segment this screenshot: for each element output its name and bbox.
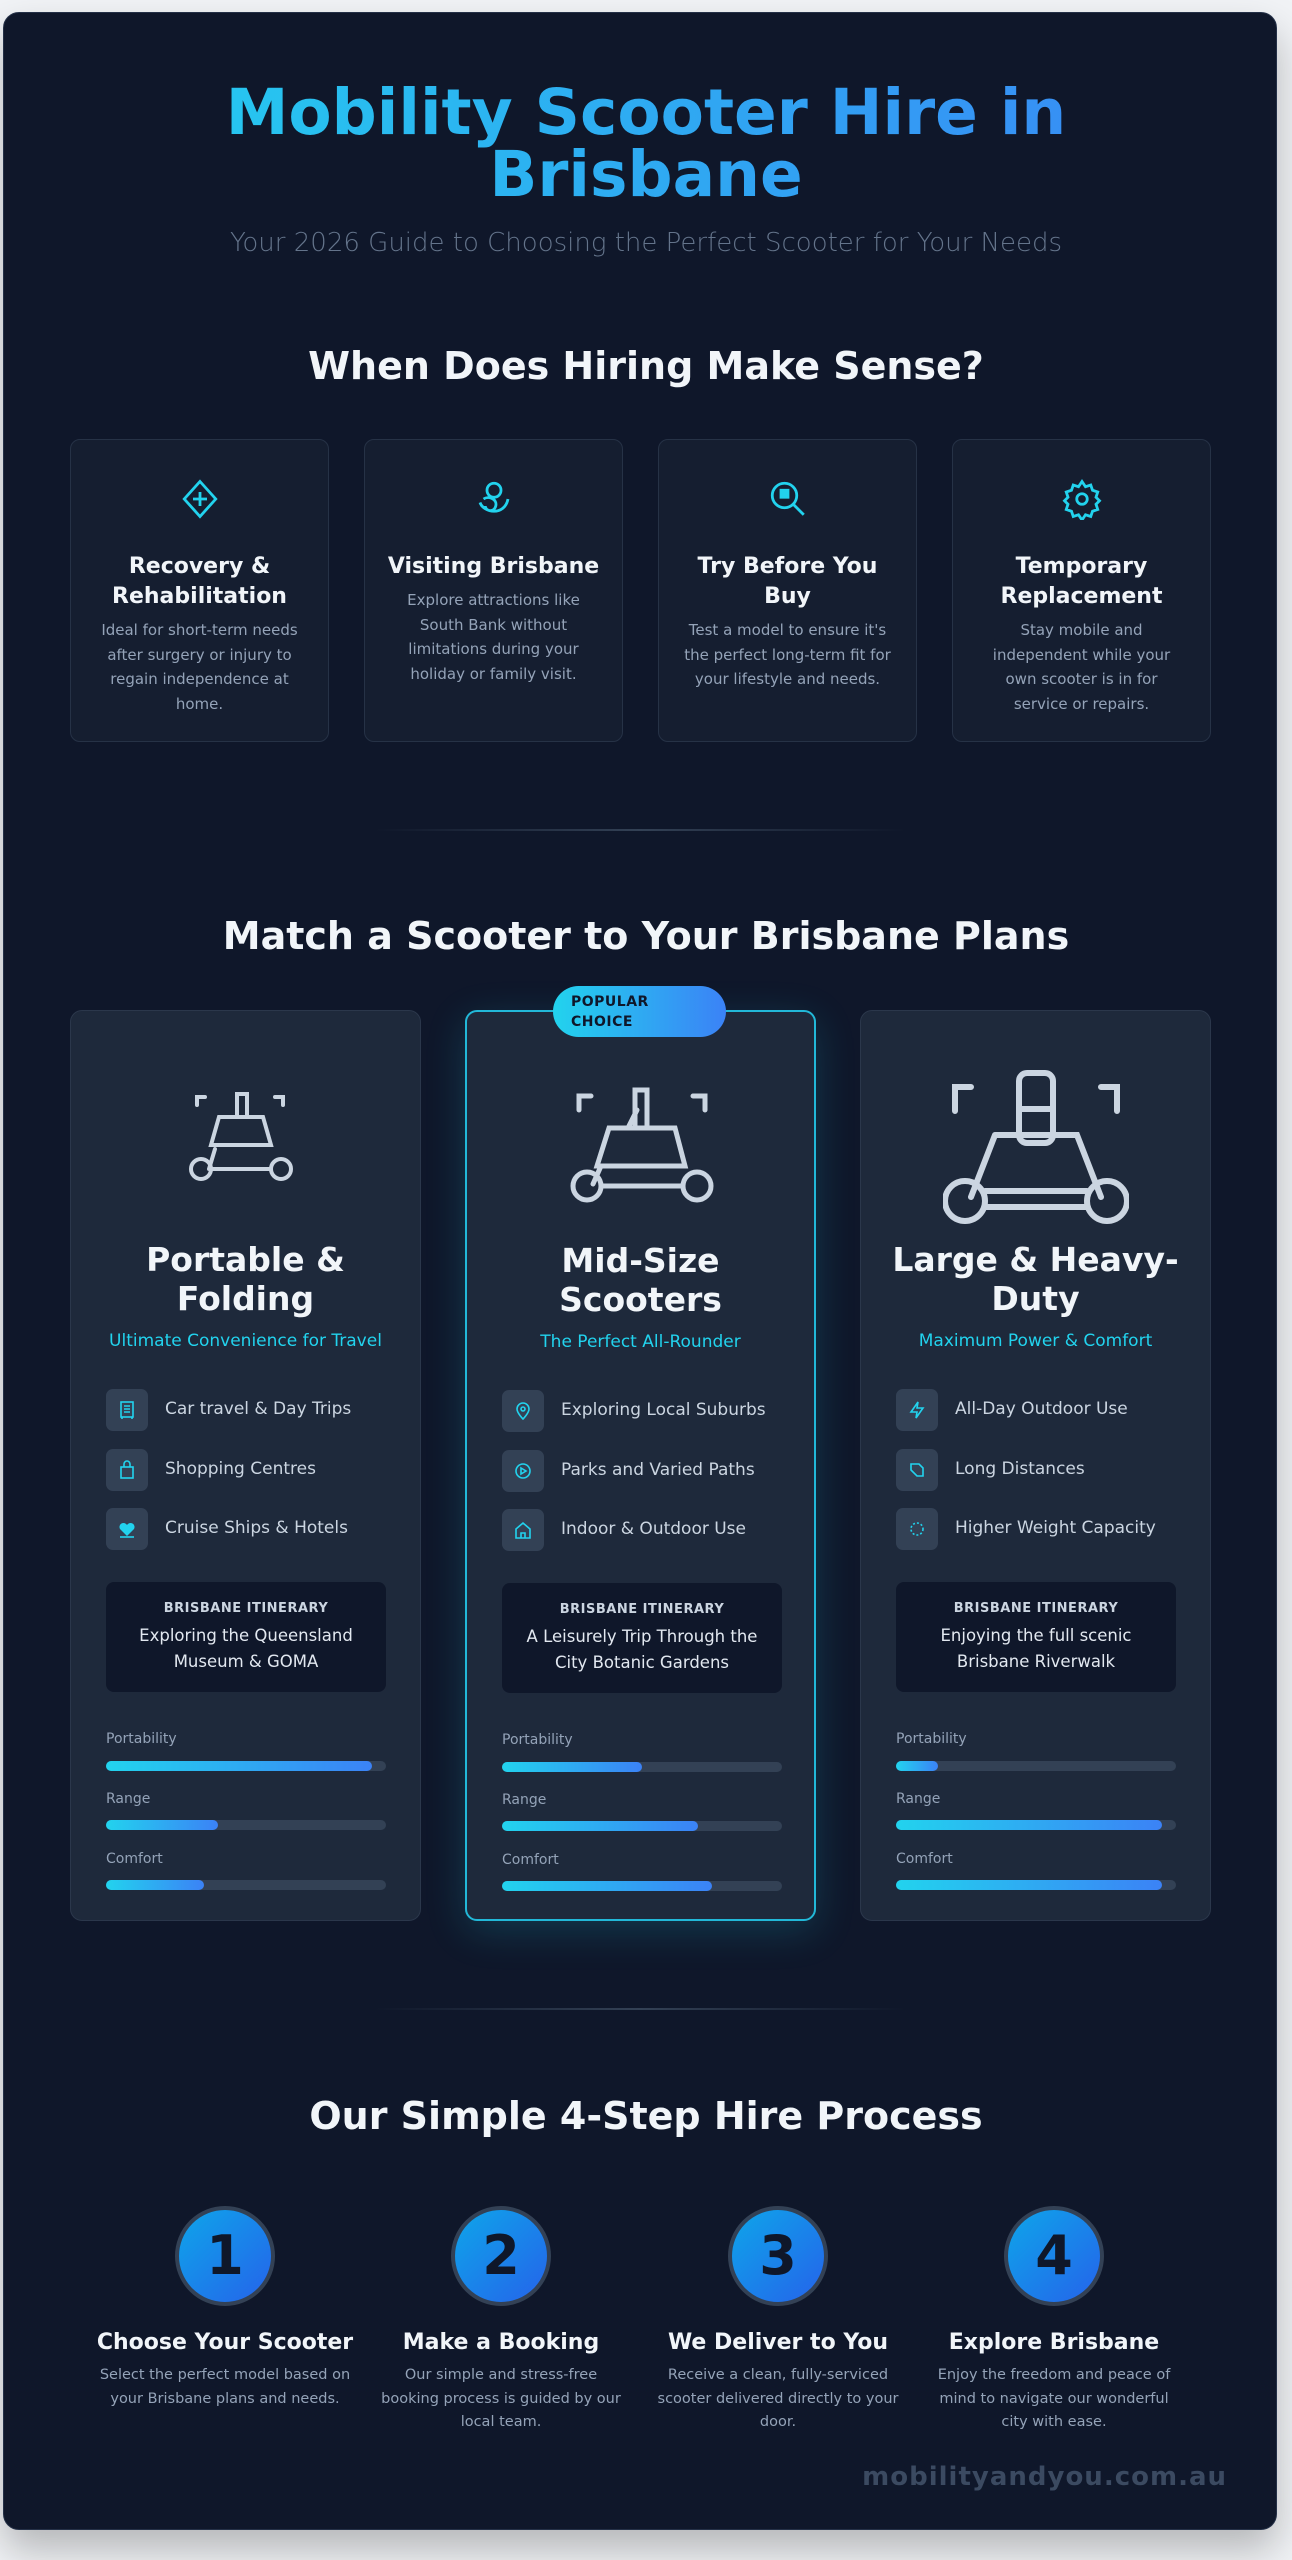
feature: cruise (106, 1508, 348, 1550)
icon: magnifier (770, 482, 805, 516)
heading: when does hiring make sense: When Does Hiring Make Sense? (308, 344, 984, 388)
itinerary box: Museum & GOMA (174, 1652, 318, 1671)
card title: Portable & (146, 1240, 345, 1279)
panel: large heavy-duty (860, 1010, 1211, 1921)
feature: weight (896, 1508, 1156, 1550)
itinerary box (896, 1582, 1176, 1692)
card title: Recovery & (129, 554, 270, 579)
itinerary box: Enjoying the full scenic (940, 1626, 1132, 1645)
icon: map swirl (478, 482, 510, 513)
itinerary box: Brisbane Riverwalk (957, 1652, 1115, 1671)
feature list (502, 1390, 766, 1551)
step 3: Receive a clean, fully-serviced scooter delivered directly to your door. (658, 2367, 898, 2430)
feature: cruise: Cruise Ships & Hotels (165, 1518, 348, 1538)
feature: long distances (896, 1449, 1085, 1491)
heading: match a scooter: Match a Scooter to Your Brisbane Plans (223, 914, 1069, 958)
feature: all-day (896, 1389, 1128, 1431)
title (0, 82, 1292, 206)
panel: recovery (70, 439, 329, 742)
icon: large scooter (943, 1070, 1129, 1224)
step 3: 3 (759, 2224, 797, 2287)
badge: popular choice: CHOICE (571, 1014, 633, 1030)
feature: parks (502, 1450, 755, 1492)
step 4 (938, 2206, 1171, 2430)
panel: mid-size (popular) (465, 1010, 816, 1921)
card title (698, 554, 877, 609)
feature: car travel (106, 1389, 351, 1431)
step 4: Explore Brisbane (949, 2330, 1159, 2355)
card title: Buy (764, 584, 811, 609)
panel: large heavy-duty: Portability (896, 1731, 967, 1747)
itinerary box: A Leisurely Trip Through the (527, 1627, 757, 1646)
rating bars (106, 1731, 386, 1890)
card title (559, 1241, 722, 1319)
feature: shopping: Shopping Centres (165, 1459, 316, 1479)
card text: Ideal for short-term needs after surgery or injury to regain independence at home. (101, 621, 298, 712)
itinerary box: BRISBANE ITINERARY (954, 1601, 1118, 1616)
itinerary box (106, 1582, 386, 1692)
feature: indoor outdoor: Indoor & Outdoor Use (561, 1519, 746, 1539)
itinerary box: BRISBANE ITINERARY (560, 1602, 724, 1617)
step 4: Enjoy the freedom and peace of mind to navigate our wonderful city with ease. (938, 2367, 1170, 2430)
card title: Folding (177, 1279, 314, 1318)
badge: popular choice (553, 986, 726, 1037)
step 2 (381, 2206, 621, 2430)
itinerary box: Exploring the Queensland (139, 1626, 353, 1645)
card subtitle: Ultimate Convenience for Travel (109, 1331, 382, 1351)
icon: gear (1062, 479, 1102, 520)
panel: visiting (364, 439, 623, 742)
card title (112, 554, 287, 609)
card subtitle: Maximum Power & Comfort (919, 1331, 1152, 1351)
step 1: Choose Your Scooter (97, 2330, 353, 2355)
feature: long distances: Long Distances (955, 1459, 1085, 1479)
feature: shopping (106, 1449, 316, 1491)
feature: parks: Parks and Varied Paths (561, 1460, 755, 1480)
itinerary box: City Botanic Gardens (555, 1653, 729, 1672)
icon: mid scooter (570, 1088, 714, 1202)
panel: mid-size (popular): Comfort (502, 1852, 559, 1868)
panel: portable: Range (106, 1791, 150, 1807)
card title: Temporary (1016, 554, 1147, 579)
panel: mid-size (popular): Range (502, 1792, 546, 1808)
card title (1000, 554, 1162, 609)
step 2: Make a Booking (403, 2330, 599, 2355)
itinerary box: BRISBANE ITINERARY (164, 1601, 328, 1616)
card text: Explore attractions like South Bank without limitations during your holiday or family visit. (407, 591, 580, 682)
step 1: 1 (206, 2224, 244, 2287)
card title: Mid-Size (561, 1241, 720, 1280)
feature: suburbs: Exploring Local Suburbs (561, 1400, 766, 1420)
card title: Visiting Brisbane (388, 554, 599, 579)
footer brand: mobilityandyou.com.au (862, 2462, 1227, 2492)
card text: Test a model to ensure it's the perfect long-term fit for your lifestyle and needs. (684, 621, 891, 688)
panel: portable: Comfort (106, 1851, 163, 1867)
feature: indoor outdoor (502, 1509, 746, 1551)
step 3 (658, 2206, 898, 2430)
feature list (106, 1389, 351, 1550)
card title (146, 1240, 345, 1318)
step 2: Our simple and stress-free booking process is guided by our local team. (381, 2367, 621, 2430)
card text: Stay mobile and independent while your own scooter is in for service or repairs. (993, 621, 1170, 712)
panel: large heavy-duty: Comfort (896, 1851, 953, 1867)
icon: medical diamond (182, 480, 218, 518)
card title: Try Before You (698, 554, 877, 579)
title: Mobility Scooter Hire in (226, 76, 1066, 149)
card title: Rehabilitation (112, 584, 287, 609)
card title: Duty (991, 1279, 1080, 1318)
panel: try before buy (658, 439, 917, 742)
step 2: 2 (482, 2224, 520, 2287)
panel: large heavy-duty: Range (896, 1791, 940, 1807)
feature: weight: Higher Weight Capacity (955, 1518, 1156, 1538)
panel: portable: Portability (106, 1731, 177, 1747)
feature: all-day: All-Day Outdoor Use (955, 1399, 1128, 1419)
subtitle: Your 2026 Guide to Choosing the Perfect Scooter for Your Needs (230, 228, 1062, 258)
panel: portable (70, 1010, 421, 1921)
card title (892, 1240, 1179, 1318)
step 4: 4 (1035, 2224, 1073, 2287)
card title: Replacement (1000, 584, 1162, 609)
feature: suburbs (502, 1390, 766, 1432)
card title: Large & Heavy- (892, 1240, 1179, 1279)
icon: small scooter (189, 1092, 293, 1181)
step 3: We Deliver to You (668, 2330, 888, 2355)
card subtitle: The Perfect All-Rounder (540, 1332, 741, 1352)
step 1: Select the perfect model based on your Brisbane plans and needs. (100, 2367, 350, 2406)
itinerary box (502, 1583, 782, 1693)
feature: car travel: Car travel & Day Trips (165, 1399, 351, 1419)
rating bars (896, 1731, 1176, 1890)
step 1 (97, 2206, 354, 2406)
heading: 4-step process: Our Simple 4-Step Hire Process (309, 2094, 983, 2138)
badge: popular choice: POPULAR (571, 994, 649, 1010)
feature list (896, 1389, 1156, 1550)
rating bars (502, 1732, 782, 1891)
card title: Scooters (559, 1280, 722, 1319)
panel: temporary replacement (952, 439, 1211, 742)
panel: mid-size (popular): Portability (502, 1732, 573, 1748)
title: Brisbane (489, 138, 803, 211)
